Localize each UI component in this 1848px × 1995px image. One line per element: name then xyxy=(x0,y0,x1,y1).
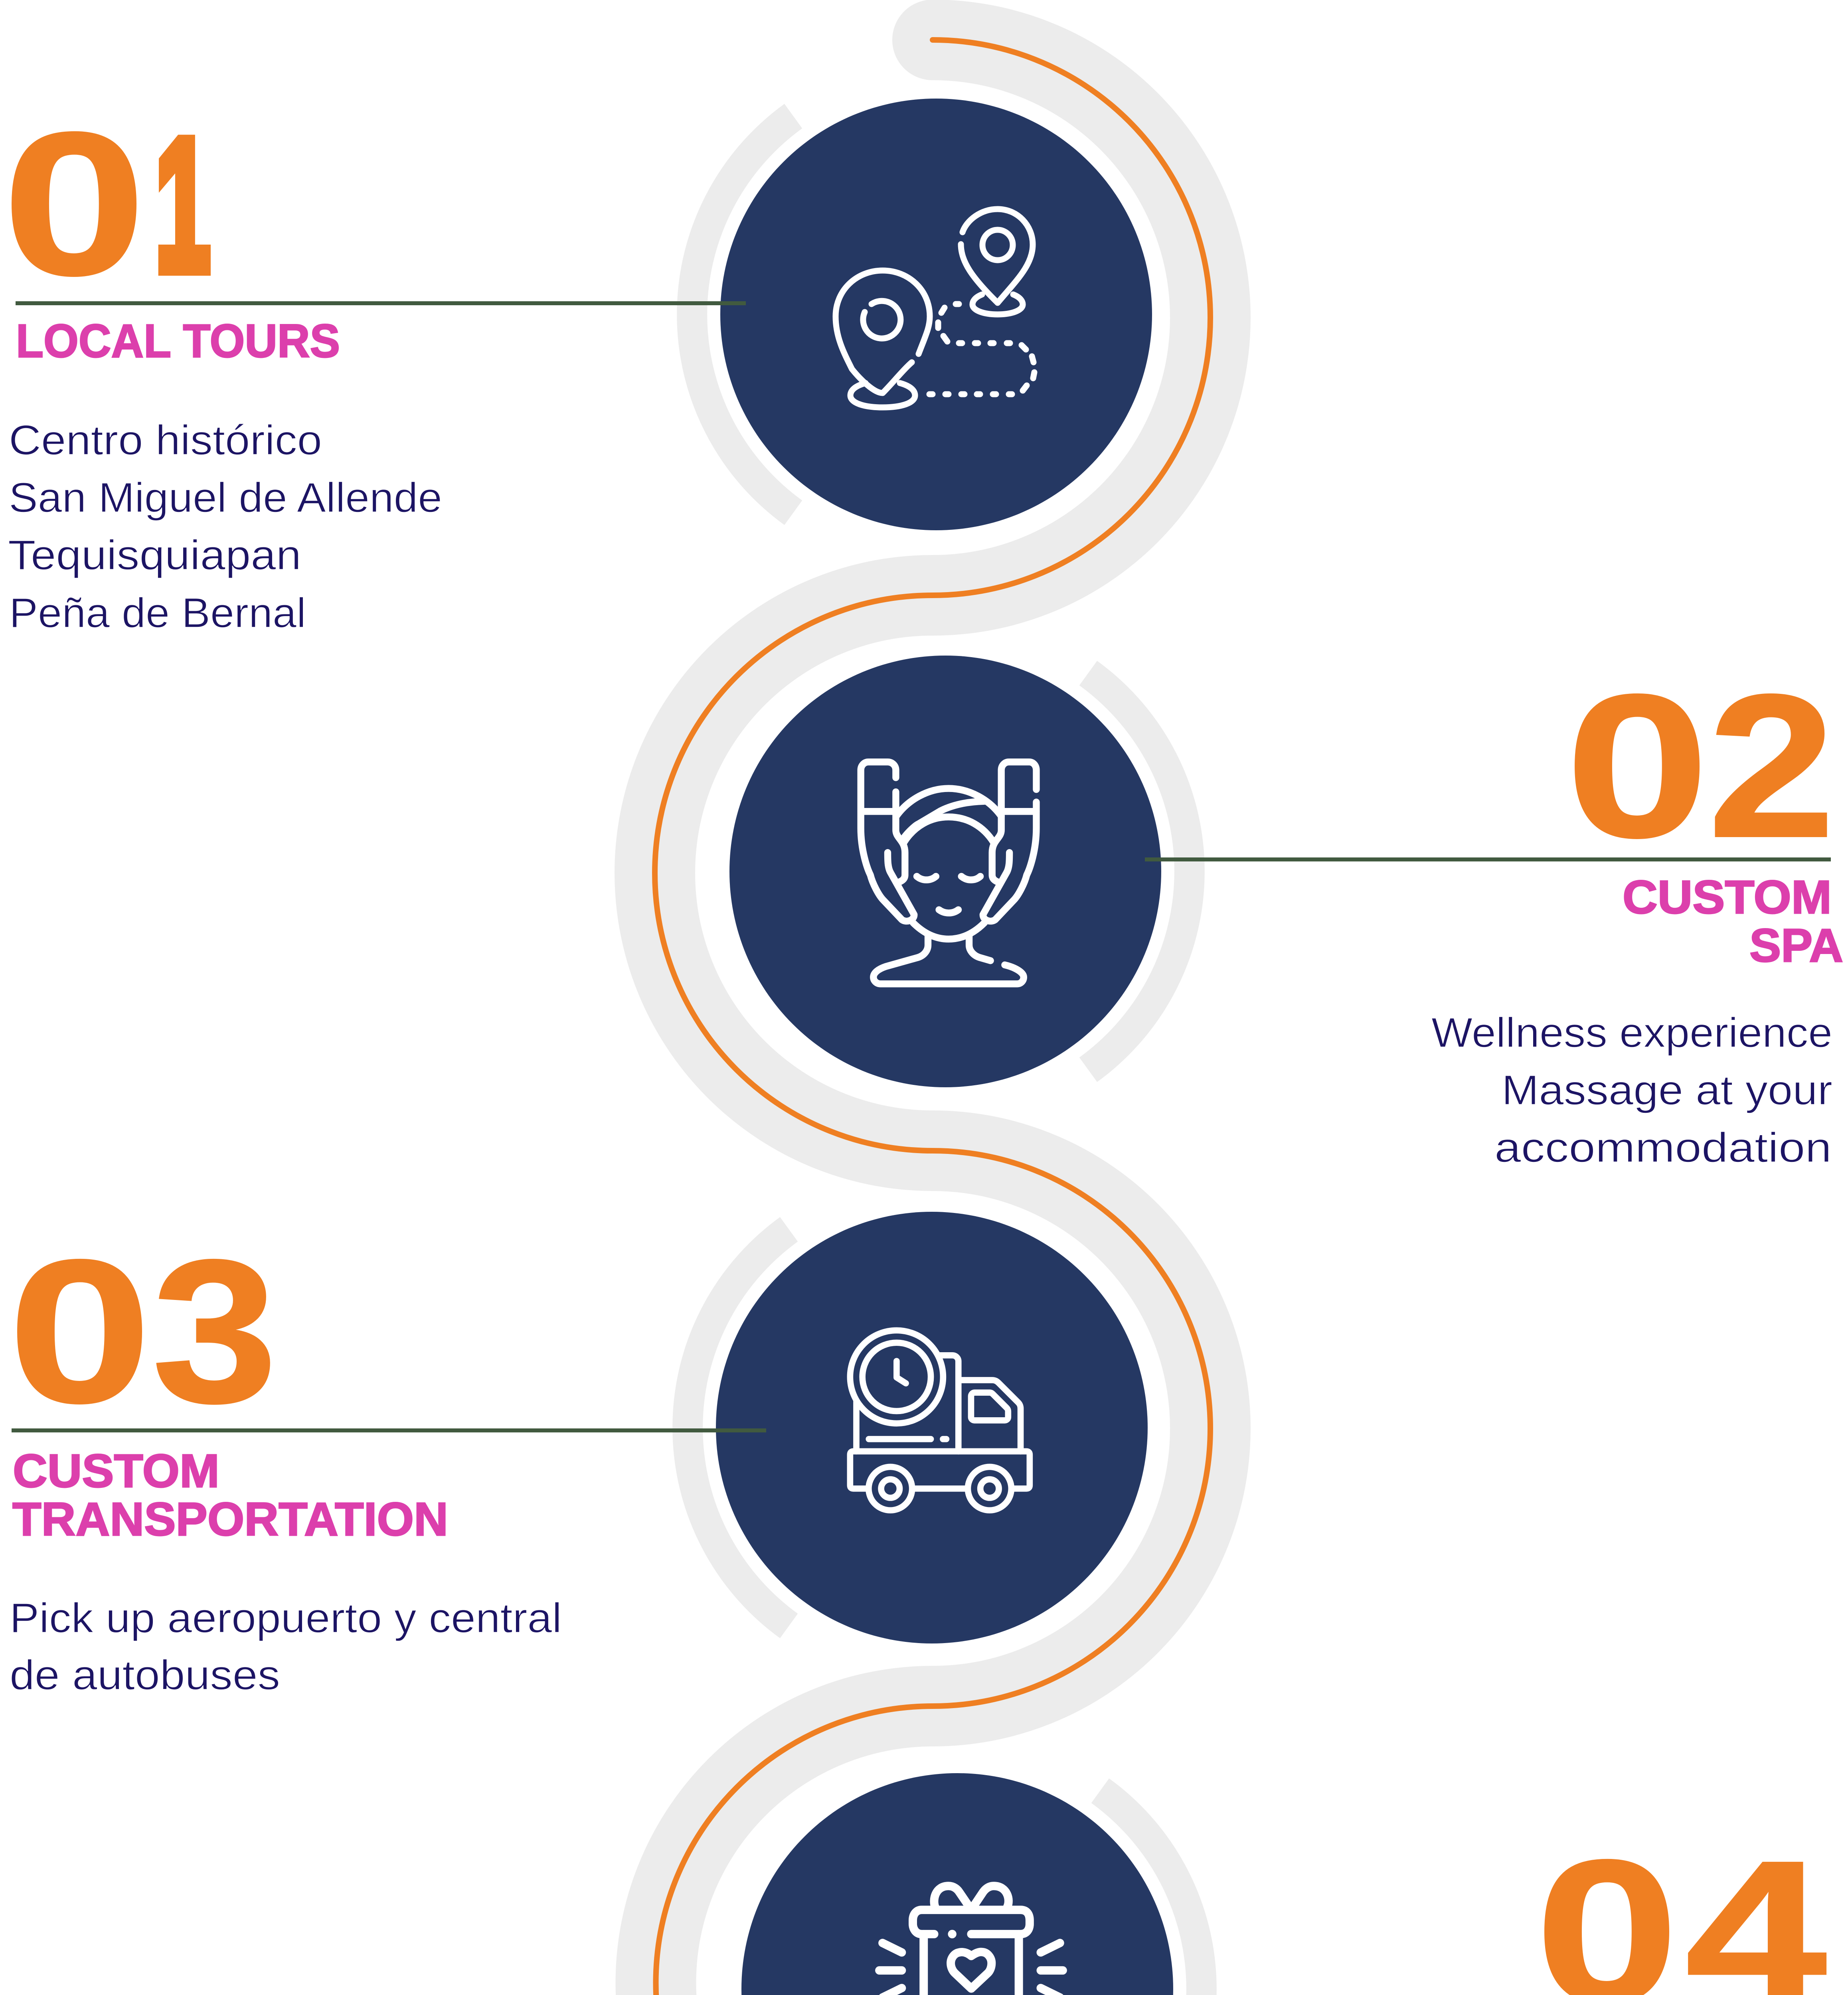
connector line 03 xyxy=(12,1428,766,1432)
heading: custom transportation xyxy=(12,1445,448,1546)
winding path xyxy=(655,40,1210,1995)
heading: custom transportation: TRANSPORTATION xyxy=(12,1493,448,1546)
connector line 02 xyxy=(1145,857,1831,861)
heading: custom spa xyxy=(1623,871,1843,972)
number 03 xyxy=(8,1218,277,1445)
icon: delivery truck with clock xyxy=(850,1330,1030,1510)
text: spa description: accommodation xyxy=(1494,1124,1832,1171)
number 02: 0 xyxy=(1565,652,1709,880)
text: transportation description: de autobuses xyxy=(10,1652,280,1699)
text: tour list xyxy=(8,417,442,636)
icon: gift on hand xyxy=(873,1886,1063,1995)
side arc 03 xyxy=(688,1229,789,1626)
text: spa description: Wellness experience xyxy=(1431,1009,1832,1056)
number 02 xyxy=(1565,652,1835,880)
circle 01 xyxy=(720,99,1152,530)
icon: facial massage xyxy=(861,762,1036,984)
heading: local tours: LOCAL TOURS xyxy=(16,315,340,367)
text: spa description: Massage at your xyxy=(1502,1067,1832,1114)
heading: custom spa: SPA xyxy=(1749,919,1843,972)
number 03: 0 xyxy=(8,1218,152,1445)
connector line 01 xyxy=(16,301,746,305)
side arc 02 xyxy=(1088,673,1190,1070)
text: transportation description: Pick up aeropuerto y central xyxy=(10,1595,562,1641)
number 04 xyxy=(1535,1818,1828,1995)
icon: map pins with route xyxy=(836,209,1034,407)
number 02: 2 xyxy=(1708,652,1835,880)
text: tour list: San Miguel de Allende xyxy=(9,474,442,521)
side arc 01 xyxy=(692,116,793,513)
number 01: 1 xyxy=(155,100,210,310)
panel: step 01 local tours xyxy=(2,90,1152,636)
heading: custom spa: CUSTOM xyxy=(1623,871,1832,924)
panel: step 04 custom catering xyxy=(741,1773,1833,1995)
text: tour list: Peña de Bernal xyxy=(9,590,306,636)
circle 04 xyxy=(741,1773,1173,1995)
number 03: 3 xyxy=(152,1218,277,1445)
number 01 xyxy=(2,90,210,318)
text: transportation description xyxy=(10,1595,562,1699)
heading: custom transportation: CUSTOM xyxy=(13,1445,219,1497)
text: tour list: Centro histórico xyxy=(9,417,322,464)
circle 03 xyxy=(716,1212,1148,1643)
panel: step 03 custom transportation xyxy=(8,1212,1148,1699)
text: tour list: Tequisquiapan xyxy=(8,532,301,579)
panel: step 02 custom spa xyxy=(729,652,1843,1171)
number 01: 0 xyxy=(2,90,146,318)
side arc 04 xyxy=(1100,1791,1202,1995)
circle 02 xyxy=(729,656,1161,1087)
text: spa description xyxy=(1431,1009,1832,1171)
